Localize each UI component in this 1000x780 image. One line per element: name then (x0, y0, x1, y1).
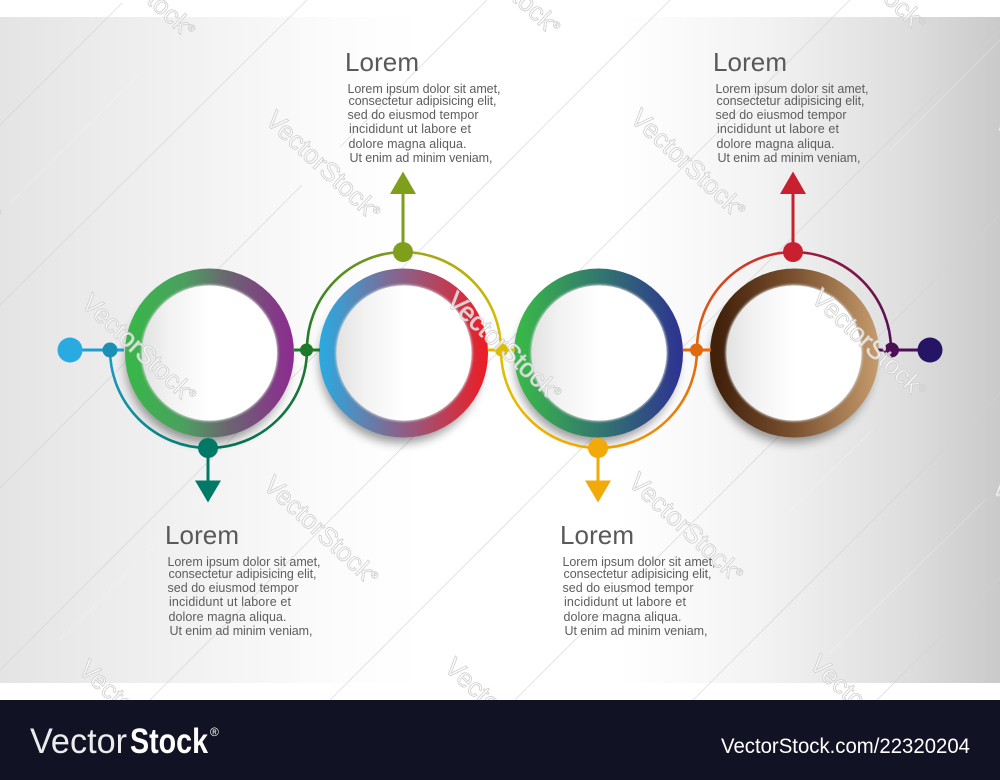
watermarks: VectorStock (625, 102, 747, 219)
watermarks: ® (549, 751, 562, 765)
text block: top centre: Ut enim ad minim veniam, (350, 151, 492, 165)
start node (58, 338, 82, 362)
text block: top right: Lorem ipsum dolor sit amet, (716, 82, 868, 96)
footer reference: VectorStock.com/22320204 (721, 735, 970, 758)
text block: bottom centre: sed do eiusmod tempor (562, 581, 694, 595)
watermarks: VectorStock (623, 466, 745, 583)
text block: top centre: consectetur adipisicing elit, (348, 94, 496, 108)
watermarks: VectorStock (258, 469, 380, 586)
text block: top right (713, 47, 868, 165)
watermarks: VectorStock (260, 104, 382, 221)
text block: top centre: Lorem (345, 47, 419, 77)
arrow: up olive (390, 172, 416, 262)
text block: bottom centre: incididunt ut labore et (564, 595, 687, 609)
watermarks: ® (183, 753, 196, 767)
text block: bottom centre: Ut enim ad minim veniam, (564, 624, 708, 638)
end node (918, 338, 942, 362)
text block: top right: consectetur adipisicing elit, (716, 94, 864, 108)
horizontal connectors and small nodes (70, 342, 930, 358)
text block: top right: dolore magna aliqua. (716, 137, 834, 151)
text block: top right: Lorem (713, 47, 787, 77)
text block: top centre: dolore magna aliqua. (348, 137, 466, 151)
watermarks: VectorStock (76, 287, 198, 404)
text block: top centre: Lorem ipsum dolor sit amet, (348, 82, 500, 96)
text block: bottom centre: dolore magna aliqua. (564, 610, 682, 624)
text block: bottom left: Lorem ipsum dolor sit amet, (168, 555, 320, 569)
watermarks: ® (550, 19, 563, 33)
footer band (0, 700, 1000, 780)
text block: bottom left: dolore magna aliqua. (168, 610, 286, 624)
text block: top centre (345, 47, 500, 165)
arrow: down amber (585, 438, 611, 502)
registered mark: ® (210, 725, 219, 739)
watermarks: ® (916, 382, 929, 396)
text block: bottom left: Ut enim ad minim veniam, (170, 624, 312, 638)
watermarks: VectorStock (73, 653, 195, 770)
text block: top centre: sed do eiusmod tempor (348, 108, 478, 122)
text block: top centre: incididunt ut labore et (349, 122, 472, 136)
text block: bottom left (165, 520, 320, 638)
watermarks: ® (916, 15, 929, 29)
text block: bottom left: consectetur adipisicing elit, (168, 567, 316, 581)
watermarks: ® (551, 385, 564, 399)
footer logo light word: Vector (30, 722, 127, 761)
ring 3 (514, 268, 683, 443)
watermarks: ® (370, 204, 383, 218)
ring 4 (710, 268, 879, 443)
text block: bottom left: Lorem (165, 520, 239, 550)
text block: top right: sed do eiusmod tempor (716, 108, 846, 122)
text block: top right: incididunt ut labore et (717, 122, 840, 136)
watermarks: ® (368, 569, 381, 583)
arrow: up red (780, 172, 806, 262)
watermarks: VectorStock (806, 282, 928, 399)
text block: bottom centre: Lorem ipsum dolor sit amet, (562, 555, 716, 569)
connector arcs (110, 252, 891, 448)
ring 2 (319, 268, 488, 443)
watermarks: VectorStock (439, 651, 561, 768)
text block: bottom left: incididunt ut labore et (169, 595, 292, 609)
watermarks: ® (914, 748, 927, 762)
arrow: down teal (195, 438, 221, 502)
watermarks: VectorStock (441, 285, 563, 402)
watermarks: ® (185, 22, 198, 36)
watermarks: ® (186, 387, 199, 401)
text block: bottom left: sed do eiusmod tempor (168, 581, 298, 595)
text block: top right: Ut enim ad minim veniam, (718, 151, 860, 165)
footer logo bold word: Stock (130, 722, 208, 761)
text block: bottom centre: Lorem (560, 520, 634, 550)
text block: bottom centre (560, 520, 716, 638)
watermarks: ® (735, 202, 748, 216)
text block: bottom centre: consectetur adipisicing elit, (564, 567, 712, 581)
ring 1 (125, 268, 294, 443)
watermarks: ® (733, 566, 746, 580)
watermarks: VectorStock (804, 648, 926, 765)
